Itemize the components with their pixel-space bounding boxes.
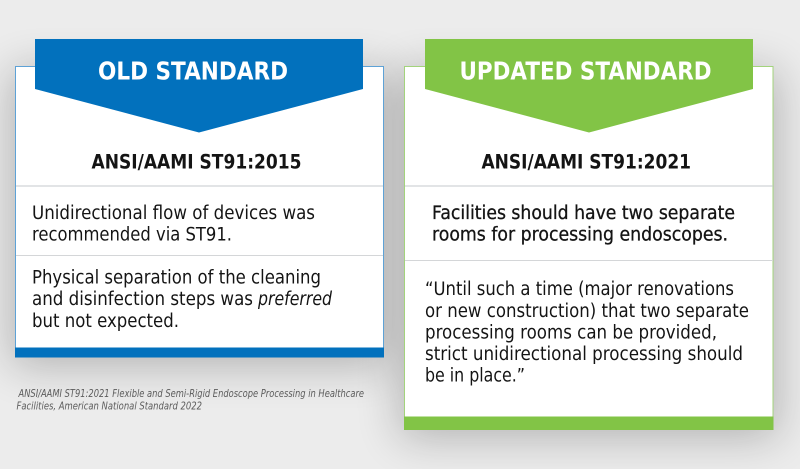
text block: unidirectional flow — [32, 203, 315, 246]
text block: two separate rooms: Facilities should have two separate — [432, 203, 735, 224]
text block: quote: processing rooms can be provided, — [425, 322, 717, 344]
subheading: ANSI/AAMI ST91:2021: ANSI/AAMI ST91:2021 — [482, 150, 691, 174]
footnote: ANSI/AAMI ST91:2021 Flexible and Semi-Rigid Endoscope Processing in Healthcare — [18, 387, 364, 400]
text block: physical separation — [32, 268, 332, 332]
text block: quote: or new construction) that two separate — [425, 301, 749, 322]
text block: physical separation: Physical separation of the cleaning — [32, 268, 321, 288]
text block: two separate rooms — [432, 203, 735, 246]
text block: unidirectional flow: Unidirectional flow of devices was — [32, 203, 315, 224]
text block: quote: strict unidirectional processing should — [425, 344, 743, 365]
subheading: ANSI/AAMI ST91:2015: ANSI/AAMI ST91:2015 — [92, 150, 302, 174]
text block: physical separation: but not expected. — [32, 311, 179, 332]
text block: physical separation: and disinfection steps was — [32, 289, 253, 310]
heading: updated standard: UPDATED STANDARD — [460, 56, 712, 86]
card: old standard background — [16, 66, 384, 357]
bottom bar: old standard — [15, 348, 384, 358]
footnote — [16, 387, 364, 412]
panel: updated standard — [404, 39, 774, 430]
text block: quote — [425, 279, 749, 386]
heading: old standard: OLD STANDARD — [98, 56, 288, 86]
banner: old standard — [35, 39, 363, 132]
panel: old standard — [15, 39, 384, 358]
text block: physical separation: preferred — [257, 289, 332, 310]
text block: quote: “Until such a time (major renovations — [425, 279, 734, 300]
text block: quote: be in place.” — [425, 366, 525, 386]
card: updated standard background — [404, 66, 773, 430]
banner: updated standard — [425, 39, 753, 132]
bottom bar: updated standard — [404, 416, 774, 430]
text block: unidirectional flow: recommended via ST91. — [32, 224, 232, 246]
footnote: Facilities, American National Standard 2022 — [16, 400, 202, 412]
text block: two separate rooms: rooms for processing endoscopes. — [432, 224, 728, 246]
